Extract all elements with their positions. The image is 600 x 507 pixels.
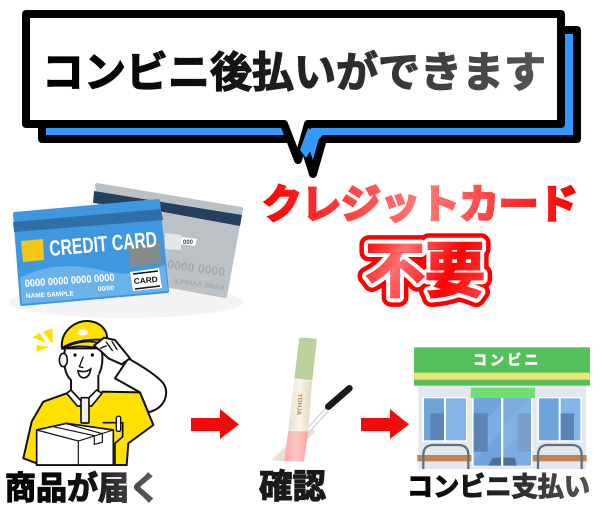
arrow 2	[361, 409, 409, 439]
credit card illustration: NAME SAMPLE	[172, 278, 225, 292]
credit card illustration: CARD	[133, 275, 158, 286]
credit card illustration	[9, 185, 243, 318]
arrow 1	[191, 409, 239, 439]
label: confirm: 確認	[259, 469, 326, 506]
credit card illustration: 0000 0000 0000 0000	[24, 272, 115, 290]
heading: credit card: クレジットカード	[262, 183, 578, 227]
label: convenience store payment: コンビニ支払い	[407, 472, 590, 502]
badge: not required: 不要	[365, 238, 485, 305]
credit card illustration: NAME SAMPLE	[26, 290, 75, 300]
credit card illustration: 00/00	[98, 285, 115, 293]
credit card illustration: 0000 0000	[167, 257, 226, 279]
title: コンビニ後払いができます	[42, 49, 546, 96]
speech bubble: front white layer	[26, 14, 561, 160]
convenience store illustration: コンビニ	[473, 352, 538, 368]
credit card illustration: 000	[183, 240, 194, 246]
mascara product	[272, 338, 349, 462]
mascara product: YOHJA	[295, 393, 303, 416]
speech bubble: back blue layer	[42, 30, 577, 174]
label: product arrives: 商品が届く	[5, 470, 160, 506]
badge: not required: 不要	[365, 238, 485, 305]
convenience store illustration	[414, 347, 590, 469]
delivery person illustration	[23, 321, 166, 465]
badge: not required: 不要	[365, 238, 485, 305]
credit card illustration: CREDIT CARD	[48, 227, 158, 261]
